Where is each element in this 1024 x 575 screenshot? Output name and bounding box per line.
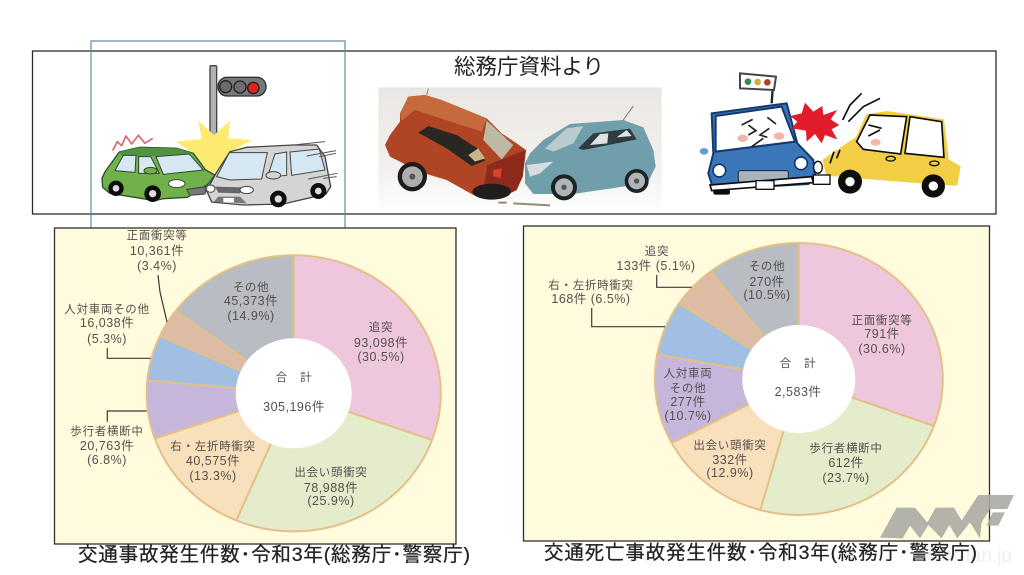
label: total: 合 計 (276, 370, 312, 384)
label: pedestrian crossing: (6.8%) (87, 453, 127, 467)
label: other person-vehicle (664, 366, 712, 423)
label: pedestrian crossing: 20,763件 (80, 439, 134, 453)
label: other person-vehicle: 16,038件 (80, 316, 134, 330)
label: turning collision: 右・左折時衝突 (170, 439, 256, 453)
label: crossing collision: 出会い頭衝突 (294, 465, 368, 479)
icon: green car (102, 135, 215, 202)
label: pedestrian crossing: 歩行者横断中 (70, 424, 144, 438)
label: turning collision: 右・左折時衝突 (548, 278, 634, 292)
label: total (263, 370, 325, 414)
label: other: 270件 (749, 275, 785, 289)
label: rear-end: 追突 (369, 320, 393, 334)
label: rear-end (354, 320, 408, 364)
label: other: その他 (749, 260, 785, 273)
label: other: (10.5%) (743, 288, 791, 302)
icon: crash flash (176, 121, 253, 174)
label: other: (14.9%) (227, 309, 275, 323)
watermark logo (880, 495, 1014, 538)
caption: fatal accidents: 交通死亡事故発生件数･令和3年(総務庁･警察庁) (544, 542, 977, 564)
label: other person-vehicle: (5.3%) (87, 332, 127, 346)
label: head-on: 791件 (864, 327, 900, 341)
icon: traffic signal (210, 66, 266, 136)
icon: sign signal (740, 73, 776, 103)
label: rear-end: (30.5%) (357, 350, 405, 364)
label: head-on: (30.6%) (858, 342, 906, 356)
label: total (775, 356, 821, 399)
icon: blue car (525, 106, 656, 200)
leader lines (107, 275, 167, 422)
label: head-on: 10,361件 (130, 244, 184, 258)
panel: fatal accidents donut chart (524, 226, 990, 541)
label: crossing collision: (12.9%) (706, 466, 754, 480)
label: other person-vehicle: 人対車両 (664, 366, 712, 380)
label: turning collision: 168件 (6.5%) (551, 292, 631, 306)
label: total: 合 計 (780, 356, 816, 370)
donut chart: accidents (147, 255, 441, 531)
illustration: blue and yellow cartoon cars colliding (700, 73, 960, 198)
panel background (524, 226, 990, 541)
icon: blue car (700, 103, 830, 195)
label: pedestrian crossing: 歩行者横断中 (809, 441, 883, 455)
debris (498, 203, 550, 205)
label: crossing collision: 出会い頭衝突 (693, 438, 767, 452)
leader lines (592, 275, 692, 327)
label: turning collision (170, 439, 256, 483)
blue selection frame (91, 41, 345, 229)
label: total: 2,583件 (775, 385, 821, 399)
label: rear-end: 追突 (645, 244, 669, 258)
label: total: 305,196件 (263, 400, 325, 414)
panel background (54, 228, 456, 544)
label: head-on: (3.4%) (137, 259, 177, 273)
icon: yellow car (823, 93, 960, 198)
label: other (224, 281, 278, 323)
label: turning collision (548, 278, 634, 306)
heading: source: 総務庁資料より (454, 55, 604, 79)
photo: two model cars in head-on crash (378, 87, 662, 207)
header box (32, 51, 996, 214)
donut chart: fatal accidents (655, 243, 943, 515)
label: crossing collision: (25.9%) (307, 494, 355, 508)
label: other (743, 260, 791, 302)
label: rear-end (616, 244, 696, 273)
icon: red car (385, 88, 526, 200)
label: other person-vehicle: 277件 (670, 395, 706, 409)
label: other person-vehicle: 人対車両その他 (64, 302, 150, 316)
icon: red impact star (790, 103, 839, 143)
panel: traffic accidents donut chart (54, 228, 456, 544)
label: crossing collision (294, 465, 368, 508)
label: other person-vehicle (64, 302, 150, 346)
label: pedestrian crossing (70, 424, 144, 467)
label: pedestrian crossing: (23.7%) (822, 471, 870, 485)
label: pedestrian crossing: 612件 (828, 456, 864, 470)
label: other: その他 (233, 281, 269, 294)
label: other person-vehicle: その他 (670, 382, 706, 395)
label: other person-vehicle: (10.7%) (664, 409, 712, 423)
label: crossing collision: 332件 (712, 453, 748, 467)
illustration: green car and van at traffic signal (102, 66, 337, 207)
label: pedestrian crossing (809, 441, 883, 485)
label: rear-end: 93,098件 (354, 336, 408, 350)
label: rear-end: 133件 (5.1%) (616, 259, 696, 273)
label: turning collision: 40,575件 (186, 454, 240, 468)
label: crossing collision (693, 438, 767, 480)
caption: accidents: 交通事故発生件数･令和3年(総務庁･警察庁) (78, 544, 470, 566)
label: head-on (852, 313, 912, 356)
label: crossing collision: 78,988件 (304, 481, 358, 495)
label: head-on: 正面衝突等 (852, 313, 912, 327)
label: head-on (126, 228, 188, 273)
label: head-on: 正面衝突等 (126, 228, 188, 242)
label: other: 45,373件 (224, 294, 278, 308)
icon: silver van (206, 142, 337, 207)
watermark text: motor-fan.jp (911, 546, 1012, 566)
label: turning collision: (13.3%) (189, 469, 237, 483)
